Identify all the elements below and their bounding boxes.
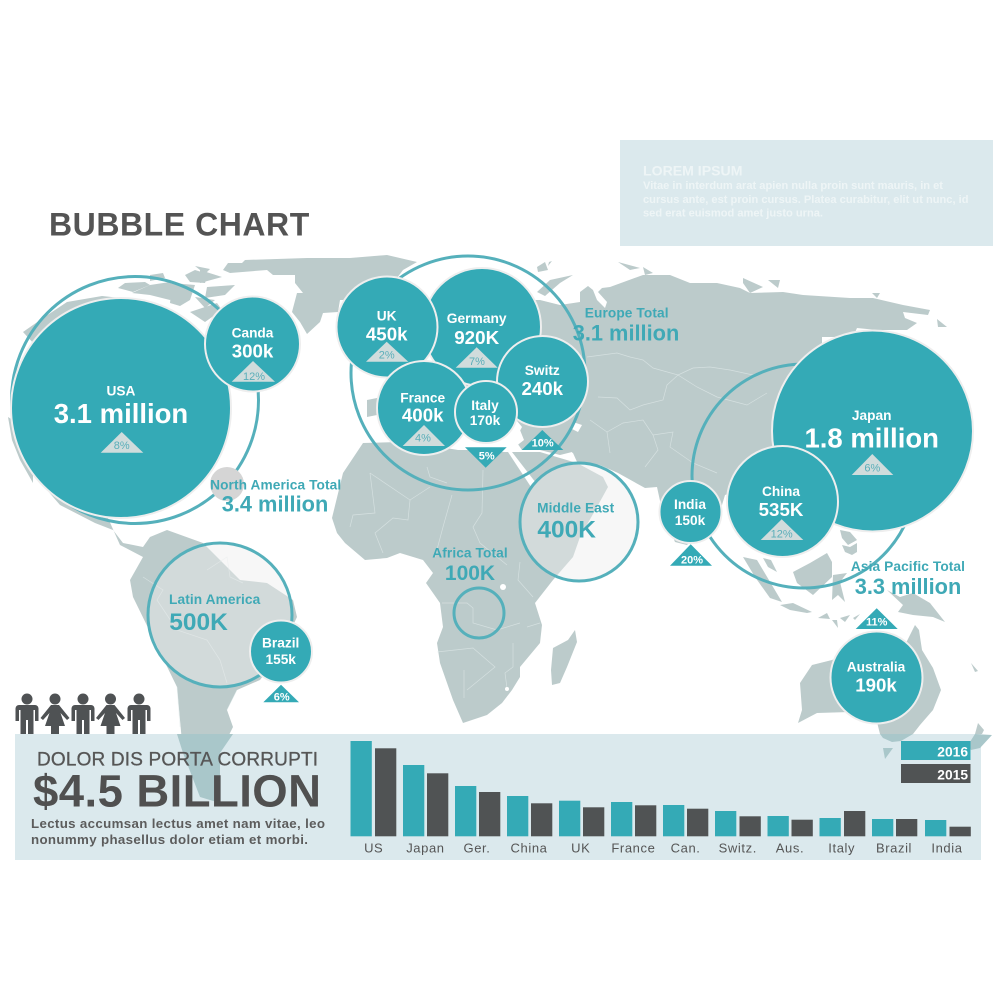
bubble: Africa: Africa Total <box>432 545 508 560</box>
info panel: lorem ipsum: cursus ante, est proin cursus. Platea curabitur, elit ut nunc, id <box>643 194 969 206</box>
bubble group: Europe: UK <box>377 309 397 324</box>
bubble group: Asia Pacific: 20% <box>681 554 703 566</box>
bar chart: 2016 vs 2015: Ger. <box>464 841 490 856</box>
bar chart: 2016 vs 2015: Brazil <box>876 841 912 856</box>
bubble group: Asia Pacific: Australia <box>847 660 906 675</box>
bar chart: 2016 vs 2015: Italy <box>828 841 855 856</box>
bubble group: Latin America <box>148 543 312 703</box>
bubble group: Europe: 450k <box>366 324 408 345</box>
bubble group: Europe: Germany <box>447 311 507 326</box>
bubble group: Europe: Europe Total <box>585 306 669 321</box>
bubble group: North America: 8% <box>114 440 130 452</box>
bubble group: Asia Pacific: 1.8 million <box>804 422 939 453</box>
bar chart: 2016 vs 2015: Japan <box>406 841 445 856</box>
seas and lakes <box>500 422 582 691</box>
summary text block: nonummy phasellus dolor etiam et morbi. <box>31 832 308 847</box>
bubble group: North America: Canda <box>232 326 274 341</box>
panel: bottom summary <box>15 734 981 860</box>
bubble group: North America: 300k <box>232 340 274 361</box>
bubble group: Asia Pacific: 535K <box>759 499 804 520</box>
map showing through panel <box>177 734 992 803</box>
icon: people row <box>16 694 150 735</box>
bubble group: Europe: 4% <box>415 433 431 445</box>
summary text block: $4.5 BILLION <box>33 766 321 817</box>
bubble group: Europe: Switz <box>525 363 560 378</box>
bubble group: Europe: 920K <box>454 327 500 348</box>
bubble group: Europe: 5% <box>479 450 495 462</box>
bubble group: Latin America: 155k <box>265 652 296 667</box>
summary text block: Lectus accumsan lectus amet nam vitae, leo <box>31 816 325 831</box>
bubble group: Latin America: Latin America <box>169 592 261 607</box>
bar chart: 2016 vs 2015: UK <box>571 841 590 856</box>
bubble group: Europe: 3.1 million <box>573 321 679 346</box>
bubble: Middle East <box>520 463 638 581</box>
bubble group: Asia Pacific: 6% <box>864 463 880 475</box>
bubble group: Asia Pacific: Asia Pacific Total <box>851 559 965 574</box>
bubble group: Europe: 10% <box>532 438 554 450</box>
bar chart: 2016 vs 2015: Can. <box>671 841 701 856</box>
bubble group: Asia Pacific: 150k <box>675 513 706 528</box>
chart legend: 2015 <box>937 767 968 782</box>
bar chart: 2016 vs 2015: France <box>611 841 655 856</box>
country borders <box>143 353 777 727</box>
bubble group: North America: North America Total <box>210 477 341 492</box>
bubble group: North America: 3.4 million <box>222 492 328 517</box>
bubble group: Latin America: 500K <box>169 609 228 636</box>
info panel: lorem ipsum <box>620 140 993 246</box>
bubble group: Europe <box>336 256 679 490</box>
summary text block <box>31 750 325 847</box>
bubble group: Europe: 7% <box>469 356 485 368</box>
bubble group: North America: 12% <box>243 371 265 383</box>
bubble group: Asia Pacific: 3.3 million <box>855 574 961 599</box>
bubble group: Asia Pacific: China <box>762 484 800 499</box>
bubble group: Europe: 2% <box>379 349 395 361</box>
title: BUBBLE CHART <box>49 206 310 242</box>
bubble group: Asia Pacific: India <box>674 497 706 512</box>
bubble group: Asia Pacific: 190k <box>855 675 897 696</box>
bubble group: North America: USA <box>107 384 136 399</box>
bar chart: 2016 vs 2015: India <box>931 841 963 856</box>
bubble group: Latin America: Brazil <box>262 636 299 651</box>
info panel: lorem ipsum: sed erat euismod amet justo urna. <box>643 208 823 220</box>
bubble group: Asia Pacific <box>660 330 973 724</box>
chart legend: 2016 <box>937 745 968 760</box>
bubble group: Asia Pacific: Japan <box>852 408 891 423</box>
bubble group: Asia Pacific: 11% <box>866 617 888 629</box>
info panel: lorem ipsum: LOREM IPSUM <box>643 162 742 178</box>
chart legend <box>901 741 970 783</box>
bar chart: 2016 vs 2015: Aus. <box>776 841 804 856</box>
bubble group: North America: 3.1 million <box>54 398 188 429</box>
bubble group: Asia Pacific: 12% <box>771 528 793 540</box>
world map <box>8 255 984 803</box>
bubble group: Latin America: 6% <box>274 691 290 703</box>
bubble: Middle East: 400K <box>537 516 596 543</box>
bar chart: 2016 vs 2015: China <box>511 841 548 856</box>
bubble: Africa: 100K <box>445 562 495 585</box>
bar chart: 2016 vs 2015: US <box>364 841 383 856</box>
info panel: lorem ipsum: Vitae in interdum arat apien nulla proin sunt mauris, in et <box>643 180 943 192</box>
summary text block: DOLOR DIS PORTA CORRUPTI <box>37 750 318 771</box>
bubble group: Europe: France <box>400 390 446 405</box>
bubble group: Europe: 400k <box>402 405 444 426</box>
bar chart: 2016 vs 2015: Switz. <box>719 841 757 856</box>
bubble: Africa <box>432 545 508 638</box>
bubble group: Europe: Italy <box>471 398 499 413</box>
bubble group: Europe: 240k <box>522 378 564 399</box>
bubble group: North America <box>11 276 341 524</box>
bubble: Middle East: Middle East <box>537 500 615 515</box>
bubble group: Europe: 170k <box>470 413 501 428</box>
bar chart: 2016 vs 2015 <box>350 741 971 856</box>
